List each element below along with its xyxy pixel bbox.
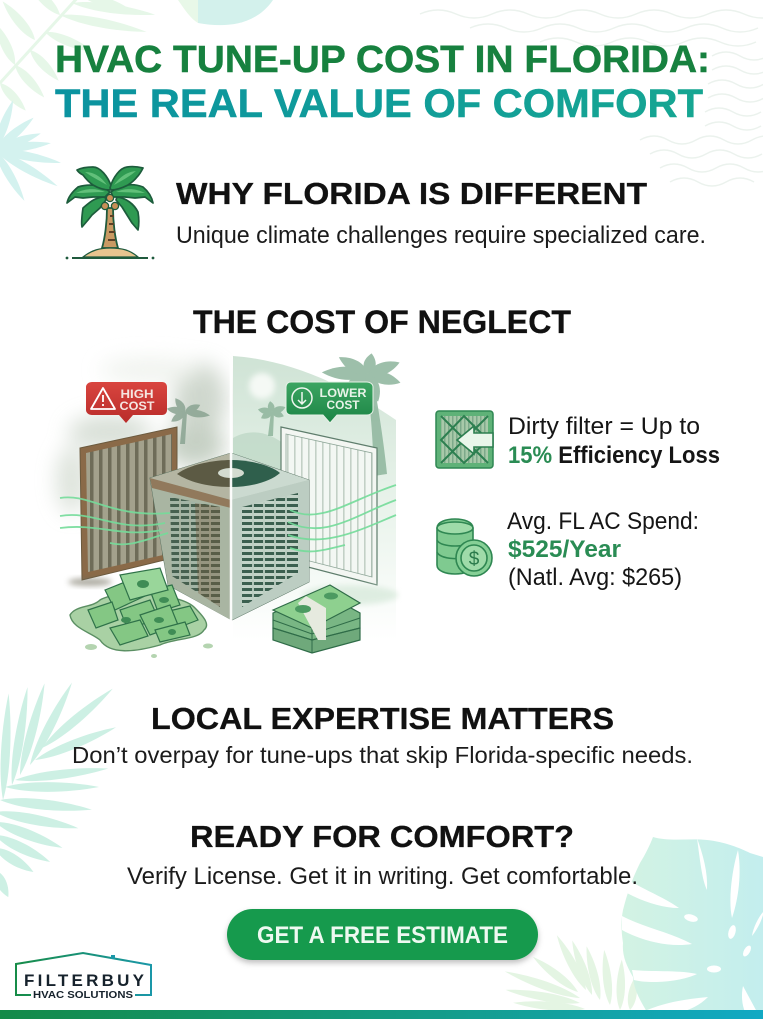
text: why Florida subtitle: Unique climate challenges require specialized care. — [176, 222, 706, 249]
heading: why Florida is different: WHY FLORIDA IS DIFFERENT — [176, 176, 647, 211]
logo: Filterbuy HVAC Solutions: FILTERBUY — [24, 971, 145, 990]
stat: average spend: $525/Year — [508, 536, 621, 563]
clean filter — [281, 427, 377, 585]
icon: palm tree — [66, 167, 154, 259]
title: HVAC TUNE-UP COST IN FLORIDA: — [55, 39, 710, 81]
stat: efficiency loss — [508, 413, 720, 469]
badge: high cost: HIGH — [120, 387, 154, 401]
stat: efficiency loss: 15% Efficiency Loss — [508, 442, 720, 469]
button: get a free estimate — [227, 909, 538, 960]
badge: lower cost: COST — [326, 398, 360, 412]
icon: coins — [437, 519, 492, 576]
icon: dirty filter — [436, 411, 493, 468]
button: get a free estimate: GET A FREE ESTIMATE — [257, 922, 508, 949]
logo: Filterbuy HVAC Solutions: HVAC SOLUTIONS — [33, 989, 133, 1001]
text: ready for comfort subtitle: Verify License. Get it in writing. Get comfortable. — [127, 863, 638, 890]
dirty filter — [80, 427, 177, 580]
text: local expertise subtitle: Don’t overpay for tune-ups that skip Florida-specific needs. — [72, 742, 693, 768]
airflow lines — [60, 485, 396, 551]
title — [55, 39, 710, 126]
illustration: dirty versus clean AC — [56, 352, 402, 665]
title: THE REAL VALUE OF COMFORT — [55, 82, 703, 126]
right clean background — [233, 356, 396, 640]
heading: ready for comfort: READY FOR COMFORT? — [190, 819, 574, 854]
stat: efficiency loss: Dirty filter = Up to — [508, 413, 700, 440]
icon: coins: $ — [469, 549, 480, 570]
stat: average spend: (Natl. Avg: $265) — [508, 564, 682, 591]
left smoke background — [56, 358, 226, 514]
heading: the cost of neglect: THE COST OF NEGLECT — [193, 304, 571, 340]
bottom gradient bar — [0, 1010, 763, 1019]
badge: high cost — [86, 382, 167, 423]
stat: average spend — [507, 508, 699, 591]
stacked clean money — [273, 585, 360, 653]
badge: lower cost: LOWER — [320, 386, 367, 400]
AC unit — [150, 453, 309, 620]
logo: Filterbuy HVAC Solutions — [16, 953, 151, 1001]
badge: high cost: COST — [120, 399, 155, 413]
heading: why Florida is different — [176, 176, 706, 249]
badge: lower cost — [286, 382, 373, 423]
heading: local expertise matters: LOCAL EXPERTISE MATTERS — [151, 701, 614, 736]
melting money pile — [70, 568, 213, 658]
stat: average spend: Avg. FL AC Spend: — [507, 508, 699, 535]
